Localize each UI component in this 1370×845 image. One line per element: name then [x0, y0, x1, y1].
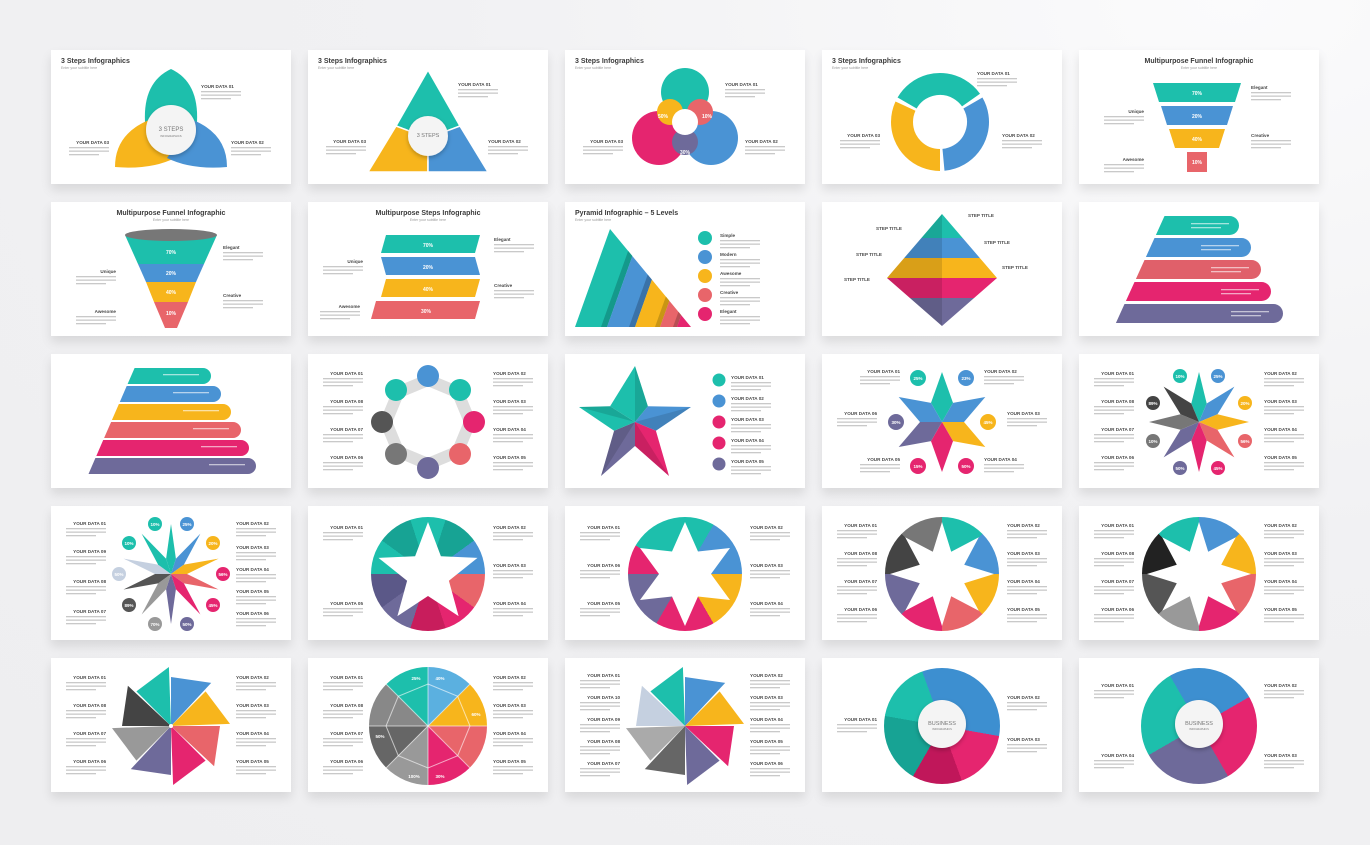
card 1: 3 steps petals [51, 50, 291, 184]
card 12: octagon ring: YOUR DATA 06 [330, 455, 363, 460]
center circle: INFOGRAPHICS [160, 134, 182, 138]
center circle [1175, 700, 1223, 748]
card 15: 8 point star: YOUR DATA 06 [1101, 455, 1134, 460]
card 5: funnel: 20% [1192, 114, 1203, 120]
card 21: pinwheel [51, 658, 291, 792]
card 16: 10 point star: YOUR DATA 04 [236, 567, 269, 572]
card 2: 3 steps triangle: 3 Steps Infographics [318, 58, 387, 65]
card 7: stacked steps: 70% [423, 243, 434, 249]
card 22: octagon circle: YOUR DATA 03 [493, 703, 526, 708]
card 5: funnel: Enter your subtitle here [1181, 66, 1217, 70]
percent circles: 50% [961, 464, 971, 469]
card 19: circle with 8 point star: YOUR DATA 04 [1007, 579, 1040, 584]
card 6: cone funnel [51, 202, 291, 336]
center circle [918, 700, 966, 748]
card 15: 8 point star: YOUR DATA 08 [1101, 399, 1134, 404]
card 1: 3 steps petals: Enter your subtitle here [61, 66, 97, 70]
card 2: 3 steps triangle [308, 50, 548, 184]
card 9: 3D pyramid: STEP TITLE [856, 252, 882, 257]
card 11: pyramid with 6 tabs [51, 354, 291, 488]
pyramid layers [887, 214, 997, 326]
card 3: venn circles: Enter your subtitle here [575, 66, 611, 70]
card 21: pinwheel: YOUR DATA 02 [236, 675, 269, 680]
card 18: circle with 6 point star: YOUR DATA 06 [587, 563, 620, 568]
card 15: 8 point star: YOUR DATA 07 [1101, 427, 1134, 432]
card 23: pinwheel 10: YOUR DATA 02 [750, 673, 783, 678]
card 10: pyramid with tabs [1079, 202, 1319, 336]
card 14: 6 point star: YOUR DATA 01 [867, 369, 900, 374]
card 16: 10 point star: YOUR DATA 08 [73, 579, 106, 584]
card 4: cycle ring: 3 Steps Infographics [832, 58, 901, 65]
card 12: octagon ring: YOUR DATA 01 [330, 371, 363, 376]
swirl circle [884, 668, 1000, 784]
card 14: 6 point star: YOUR DATA 06 [844, 411, 877, 416]
tabs [88, 368, 256, 474]
card 15: 8 point star: YOUR DATA 01 [1101, 371, 1134, 376]
card 18: circle with 6 point star: YOUR DATA 01 [587, 525, 620, 530]
stripes [575, 229, 691, 327]
legend [712, 374, 771, 474]
funnel layers [1153, 83, 1241, 172]
card 6: cone funnel: Creative [223, 293, 242, 298]
label 02: YOUR DATA 02 [231, 140, 264, 145]
pie [1142, 517, 1256, 631]
card 22: octagon circle: 40% [435, 676, 445, 681]
percent circles: 10% [124, 541, 134, 546]
card 9: 3D pyramid: STEP TITLE [1002, 265, 1028, 270]
legend: YOUR DATA 01 [731, 375, 764, 380]
card 4: cycle ring: YOUR DATA 02 [1002, 133, 1035, 138]
card 3: venn circles: 30% [680, 150, 691, 156]
card 17: circle with 5 point star: YOUR DATA 01 [330, 525, 363, 530]
card 20: circle with 8 point star: YOUR DATA 04 [1264, 579, 1297, 584]
percent circles: 56% [1240, 439, 1250, 444]
card 20: circle with 8 point star: YOUR DATA 08 [1101, 551, 1134, 556]
card 7: stacked steps: Unique [347, 259, 363, 264]
card 22: octagon circle: YOUR DATA 04 [493, 731, 526, 736]
card 22: octagon circle: YOUR DATA 08 [330, 703, 363, 708]
label 02 [231, 140, 271, 155]
card 17: circle with 5 point star: YOUR DATA 03 [493, 563, 526, 568]
card 18: circle with 6 point star: YOUR DATA 04 [750, 601, 783, 606]
card 23: pinwheel 10: YOUR DATA 03 [750, 695, 783, 700]
card 19: circle with 8 point star: YOUR DATA 01 [844, 523, 877, 528]
percent circles: 20% [208, 541, 218, 546]
legend: Awesome [720, 271, 742, 276]
card 6: cone funnel: Multipurpose Funnel Infographic [117, 210, 226, 217]
title: 3 Steps Infographics [61, 58, 130, 65]
legend [698, 231, 760, 324]
card 20: circle with 8 point star: YOUR DATA 02 [1264, 523, 1297, 528]
card 23: pinwheel 10: YOUR DATA 07 [587, 761, 620, 766]
card 22: octagon circle [308, 658, 548, 792]
legend: YOUR DATA 03 [731, 417, 764, 422]
blades [112, 667, 230, 785]
star arms [899, 372, 985, 472]
percent circles: 25% [182, 522, 192, 527]
card 7: stacked steps [308, 202, 548, 336]
card 4: cycle ring: YOUR DATA 01 [977, 71, 1010, 76]
pie [628, 517, 742, 631]
label 01 [201, 84, 241, 99]
percent circles: 56% [218, 572, 228, 577]
card 6: cone funnel: Elegant [223, 245, 240, 250]
card 14: 6 point star [822, 354, 1062, 488]
card 16: 10 point star: YOUR DATA 07 [73, 609, 106, 614]
card 7: stacked steps: Awesome [339, 304, 360, 309]
card 6: cone funnel: 40% [166, 290, 177, 296]
card 16: 10 point star: YOUR DATA 01 [73, 521, 106, 526]
card 6: cone funnel: Enter your subtitle here [153, 218, 189, 222]
card 22: octagon circle: 60% [471, 712, 481, 717]
pie [369, 667, 487, 785]
legend: Creative [720, 290, 739, 295]
card 20: circle with 8 point star: YOUR DATA 01 [1101, 523, 1134, 528]
card 5: funnel: Multipurpose Funnel Infographic [1145, 58, 1254, 65]
card 25: business swirl 4: YOUR DATA 01 [1101, 683, 1134, 688]
card 9: 3D pyramid: STEP TITLE [844, 277, 870, 282]
center circle: 3 STEPS [417, 133, 440, 139]
card 22: octagon circle: YOUR DATA 01 [330, 675, 363, 680]
center circle: BUSINESS [1185, 721, 1213, 727]
card 23: pinwheel 10: YOUR DATA 09 [587, 717, 620, 722]
card 12: octagon ring: YOUR DATA 03 [493, 399, 526, 404]
card 23: pinwheel 10: YOUR DATA 04 [750, 717, 783, 722]
card 4: cycle ring: YOUR DATA 03 [847, 133, 880, 138]
percent circles: 25% [913, 376, 923, 381]
percent circles: 45% [983, 420, 993, 425]
card 6: cone funnel: Unique [100, 269, 116, 274]
card 5: funnel: 40% [1192, 137, 1203, 143]
card 8: pyramid 5 levels: Enter your subtitle here [575, 218, 611, 222]
percent circles [1146, 369, 1252, 475]
card 15: 8 point star: YOUR DATA 02 [1264, 371, 1297, 376]
card 21: pinwheel: YOUR DATA 06 [73, 759, 106, 764]
petal yellow [115, 120, 175, 168]
percent circles: 89% [124, 603, 134, 608]
card 16: 10 point star: YOUR DATA 02 [236, 521, 269, 526]
card 8: pyramid 5 levels [565, 202, 805, 336]
label 03 [69, 140, 109, 155]
circles [632, 68, 738, 165]
pie [371, 517, 485, 631]
card 21: pinwheel: YOUR DATA 08 [73, 703, 106, 708]
card 23: pinwheel 10: YOUR DATA 01 [587, 673, 620, 678]
card 6: cone funnel: 20% [166, 271, 177, 277]
star [579, 366, 691, 476]
card 6: cone funnel: Awesome [95, 309, 116, 314]
card 12: octagon ring: YOUR DATA 02 [493, 371, 526, 376]
card 17: circle with 5 point star: YOUR DATA 04 [493, 601, 526, 606]
card 12: octagon ring [308, 354, 548, 488]
legend: YOUR DATA 02 [731, 396, 764, 401]
card 15: 8 point star [1079, 354, 1319, 488]
star arms [124, 524, 219, 624]
white star [1147, 522, 1251, 626]
petal blue [167, 120, 227, 168]
percent circles: 45% [1213, 466, 1223, 471]
card 23: pinwheel 10: YOUR DATA 05 [750, 739, 783, 744]
card 24: business swirl 3: YOUR DATA 03 [1007, 737, 1040, 742]
card 18: circle with 6 point star: YOUR DATA 03 [750, 563, 783, 568]
card 12: octagon ring: YOUR DATA 05 [493, 455, 526, 460]
card 19: circle with 8 point star [822, 506, 1062, 640]
card 5: funnel: Awesome [1123, 157, 1144, 162]
card 22: octagon circle: YOUR DATA 02 [493, 675, 526, 680]
card 16: 10 point star: YOUR DATA 09 [73, 549, 106, 554]
center circle: INFOGRAPHICS [1189, 727, 1209, 731]
pie [885, 517, 999, 631]
card 3: venn circles: YOUR DATA 02 [745, 139, 778, 144]
white star [378, 522, 478, 616]
card 8: pyramid 5 levels: Pyramid Infographic – 5 Levels [575, 210, 678, 217]
card 16: 10 point star: YOUR DATA 06 [236, 611, 269, 616]
percent circles: 50% [182, 622, 192, 627]
percent circles: 25% [1213, 374, 1223, 379]
percent circles: 30% [891, 420, 901, 425]
card 9: 3D pyramid: STEP TITLE [876, 226, 902, 231]
card 14: 6 point star: YOUR DATA 04 [984, 457, 1017, 462]
card 14: 6 point star: YOUR DATA 05 [867, 457, 900, 462]
card 22: octagon circle: YOUR DATA 06 [330, 759, 363, 764]
card 24: business swirl 3: YOUR DATA 01 [844, 717, 877, 722]
percent circles: 50% [114, 572, 124, 577]
card 19: circle with 8 point star: YOUR DATA 07 [844, 579, 877, 584]
card 23: pinwheel 10: YOUR DATA 06 [750, 761, 783, 766]
center circle [408, 116, 448, 156]
center circle: INFOGRAPHICS [932, 727, 952, 731]
card 23: pinwheel 10: YOUR DATA 10 [587, 695, 620, 700]
blades [626, 667, 744, 785]
card 19: circle with 8 point star: YOUR DATA 03 [1007, 551, 1040, 556]
tabs [1116, 216, 1283, 323]
card 21: pinwheel: YOUR DATA 01 [73, 675, 106, 680]
card 23: pinwheel 10 [565, 658, 805, 792]
label 03: YOUR DATA 03 [76, 140, 109, 145]
card 12: octagon ring: YOUR DATA 04 [493, 427, 526, 432]
card 5: funnel: Elegant [1251, 85, 1268, 90]
card 18: circle with 6 point star [565, 506, 805, 640]
card 22: octagon circle: 30% [435, 774, 445, 779]
card 2: 3 steps triangle: YOUR DATA 03 [333, 139, 366, 144]
card 17: circle with 5 point star: YOUR DATA 02 [493, 525, 526, 530]
legend: YOUR DATA 05 [731, 459, 764, 464]
card 15: 8 point star: YOUR DATA 05 [1264, 455, 1297, 460]
card 22: octagon circle: 25% [411, 676, 421, 681]
percent circles: 45% [208, 603, 218, 608]
card 20: circle with 8 point star [1079, 506, 1319, 640]
card 6: cone funnel: 10% [166, 311, 177, 317]
cone [125, 229, 217, 328]
card 5: funnel: 10% [1192, 160, 1203, 166]
swirl circle [1141, 668, 1257, 784]
percent circles: 10% [1175, 374, 1185, 379]
card 16: 10 point star: YOUR DATA 05 [236, 589, 269, 594]
card 21: pinwheel: YOUR DATA 05 [236, 759, 269, 764]
card 25: business swirl 4: YOUR DATA 02 [1264, 683, 1297, 688]
card 5: funnel: Creative [1251, 133, 1270, 138]
card 9: 3D pyramid: STEP TITLE [968, 213, 994, 218]
card 7: stacked steps: 20% [423, 265, 434, 271]
card 24: business swirl 3 [822, 658, 1062, 792]
card 12: octagon ring: YOUR DATA 08 [330, 399, 363, 404]
triangle segments [368, 70, 488, 172]
card 6: cone funnel: 70% [166, 250, 177, 256]
white star [640, 522, 730, 626]
card 19: circle with 8 point star: YOUR DATA 05 [1007, 607, 1040, 612]
card 22: octagon circle: 100% [408, 774, 420, 779]
card 22: octagon circle: 50% [375, 734, 385, 739]
percent circles: 50% [1175, 466, 1185, 471]
card 4: cycle ring: Enter your subtitle here [832, 66, 868, 70]
card 22: octagon circle: YOUR DATA 05 [493, 759, 526, 764]
card 5: funnel: 70% [1192, 91, 1203, 97]
card 7: stacked steps: 30% [421, 309, 432, 315]
card 19: circle with 8 point star: YOUR DATA 06 [844, 607, 877, 612]
card 15: 8 point star: YOUR DATA 03 [1264, 399, 1297, 404]
card 7: stacked steps: Multipurpose Steps Infographic [375, 210, 481, 217]
card 20: circle with 8 point star: YOUR DATA 07 [1101, 579, 1134, 584]
ring [888, 70, 992, 174]
card 3: venn circles: YOUR DATA 03 [590, 139, 623, 144]
card 25: business swirl 4: YOUR DATA 04 [1101, 753, 1134, 758]
card 19: circle with 8 point star: YOUR DATA 08 [844, 551, 877, 556]
card 16: 10 point star: YOUR DATA 03 [236, 545, 269, 550]
center circle: 3 STEPS [159, 127, 183, 133]
percent circles [112, 517, 230, 631]
ring segments [371, 365, 485, 479]
percent circles: 70% [150, 622, 160, 627]
card 21: pinwheel: YOUR DATA 03 [236, 703, 269, 708]
percent circles: 15% [913, 464, 923, 469]
card 3: venn circles: YOUR DATA 01 [725, 82, 758, 87]
inner octagon [369, 667, 487, 785]
card 24: business swirl 3: YOUR DATA 02 [1007, 695, 1040, 700]
card 12: octagon ring: YOUR DATA 07 [330, 427, 363, 432]
percent circles: 10% [150, 522, 160, 527]
card 2: 3 steps triangle: YOUR DATA 01 [458, 82, 491, 87]
percent circles: 10% [1148, 439, 1158, 444]
card 25: business swirl 4: YOUR DATA 03 [1264, 753, 1297, 758]
card 3: venn circles [565, 50, 805, 184]
parallelogram bars [371, 235, 480, 319]
card 7: stacked steps: 40% [423, 287, 434, 293]
card 5: funnel [1079, 50, 1319, 184]
center circle [146, 105, 196, 155]
card 17: circle with 5 point star [308, 506, 548, 640]
label 01: YOUR DATA 01 [201, 84, 234, 89]
card 9: 3D pyramid [822, 202, 1062, 336]
card 7: stacked steps: Creative [494, 283, 513, 288]
card 4: cycle ring [822, 50, 1062, 184]
card 7: stacked steps: Elegant [494, 237, 511, 242]
card 18: circle with 6 point star: YOUR DATA 05 [587, 601, 620, 606]
card 20: circle with 8 point star: YOUR DATA 06 [1101, 607, 1134, 612]
center circle: BUSINESS [928, 721, 956, 727]
legend: YOUR DATA 04 [731, 438, 764, 443]
card 17: circle with 5 point star: YOUR DATA 05 [330, 601, 363, 606]
card 9: 3D pyramid: STEP TITLE [984, 240, 1010, 245]
petal teal [145, 69, 197, 122]
card 13: 5 point star [565, 354, 805, 488]
card 15: 8 point star: YOUR DATA 04 [1264, 427, 1297, 432]
legend: Simple [720, 233, 736, 238]
card 7: stacked steps: Enter your subtitle here [410, 218, 446, 222]
card 21: pinwheel: YOUR DATA 04 [236, 731, 269, 736]
card 19: circle with 8 point star: YOUR DATA 02 [1007, 523, 1040, 528]
percent circles: 23% [961, 376, 971, 381]
card 20: circle with 8 point star: YOUR DATA 03 [1264, 551, 1297, 556]
card 2: 3 steps triangle: Enter your subtitle here [318, 66, 354, 70]
card 3: venn circles: 50% [658, 114, 669, 120]
percent circles: 20% [1240, 401, 1250, 406]
percent circles [888, 370, 996, 474]
legend: Elegant [720, 309, 737, 314]
card 21: pinwheel: YOUR DATA 07 [73, 731, 106, 736]
card 20: circle with 8 point star: YOUR DATA 05 [1264, 607, 1297, 612]
card 2: 3 steps triangle: YOUR DATA 02 [488, 139, 521, 144]
card 22: octagon circle: YOUR DATA 07 [330, 731, 363, 736]
star arms [1149, 372, 1249, 472]
percent circles: 89% [1148, 401, 1158, 406]
card 3: venn circles: 10% [702, 114, 713, 120]
card 5: funnel: Unique [1128, 109, 1144, 114]
card 16: 10 point star [51, 506, 291, 640]
card 18: circle with 6 point star: YOUR DATA 02 [750, 525, 783, 530]
white star [890, 522, 994, 626]
card 25: business swirl 4 [1079, 658, 1319, 792]
card 14: 6 point star: YOUR DATA 03 [1007, 411, 1040, 416]
card 23: pinwheel 10: YOUR DATA 08 [587, 739, 620, 744]
card 14: 6 point star: YOUR DATA 02 [984, 369, 1017, 374]
card 3: venn circles: 3 Steps Infographics [575, 58, 644, 65]
legend: Modern [720, 252, 737, 257]
